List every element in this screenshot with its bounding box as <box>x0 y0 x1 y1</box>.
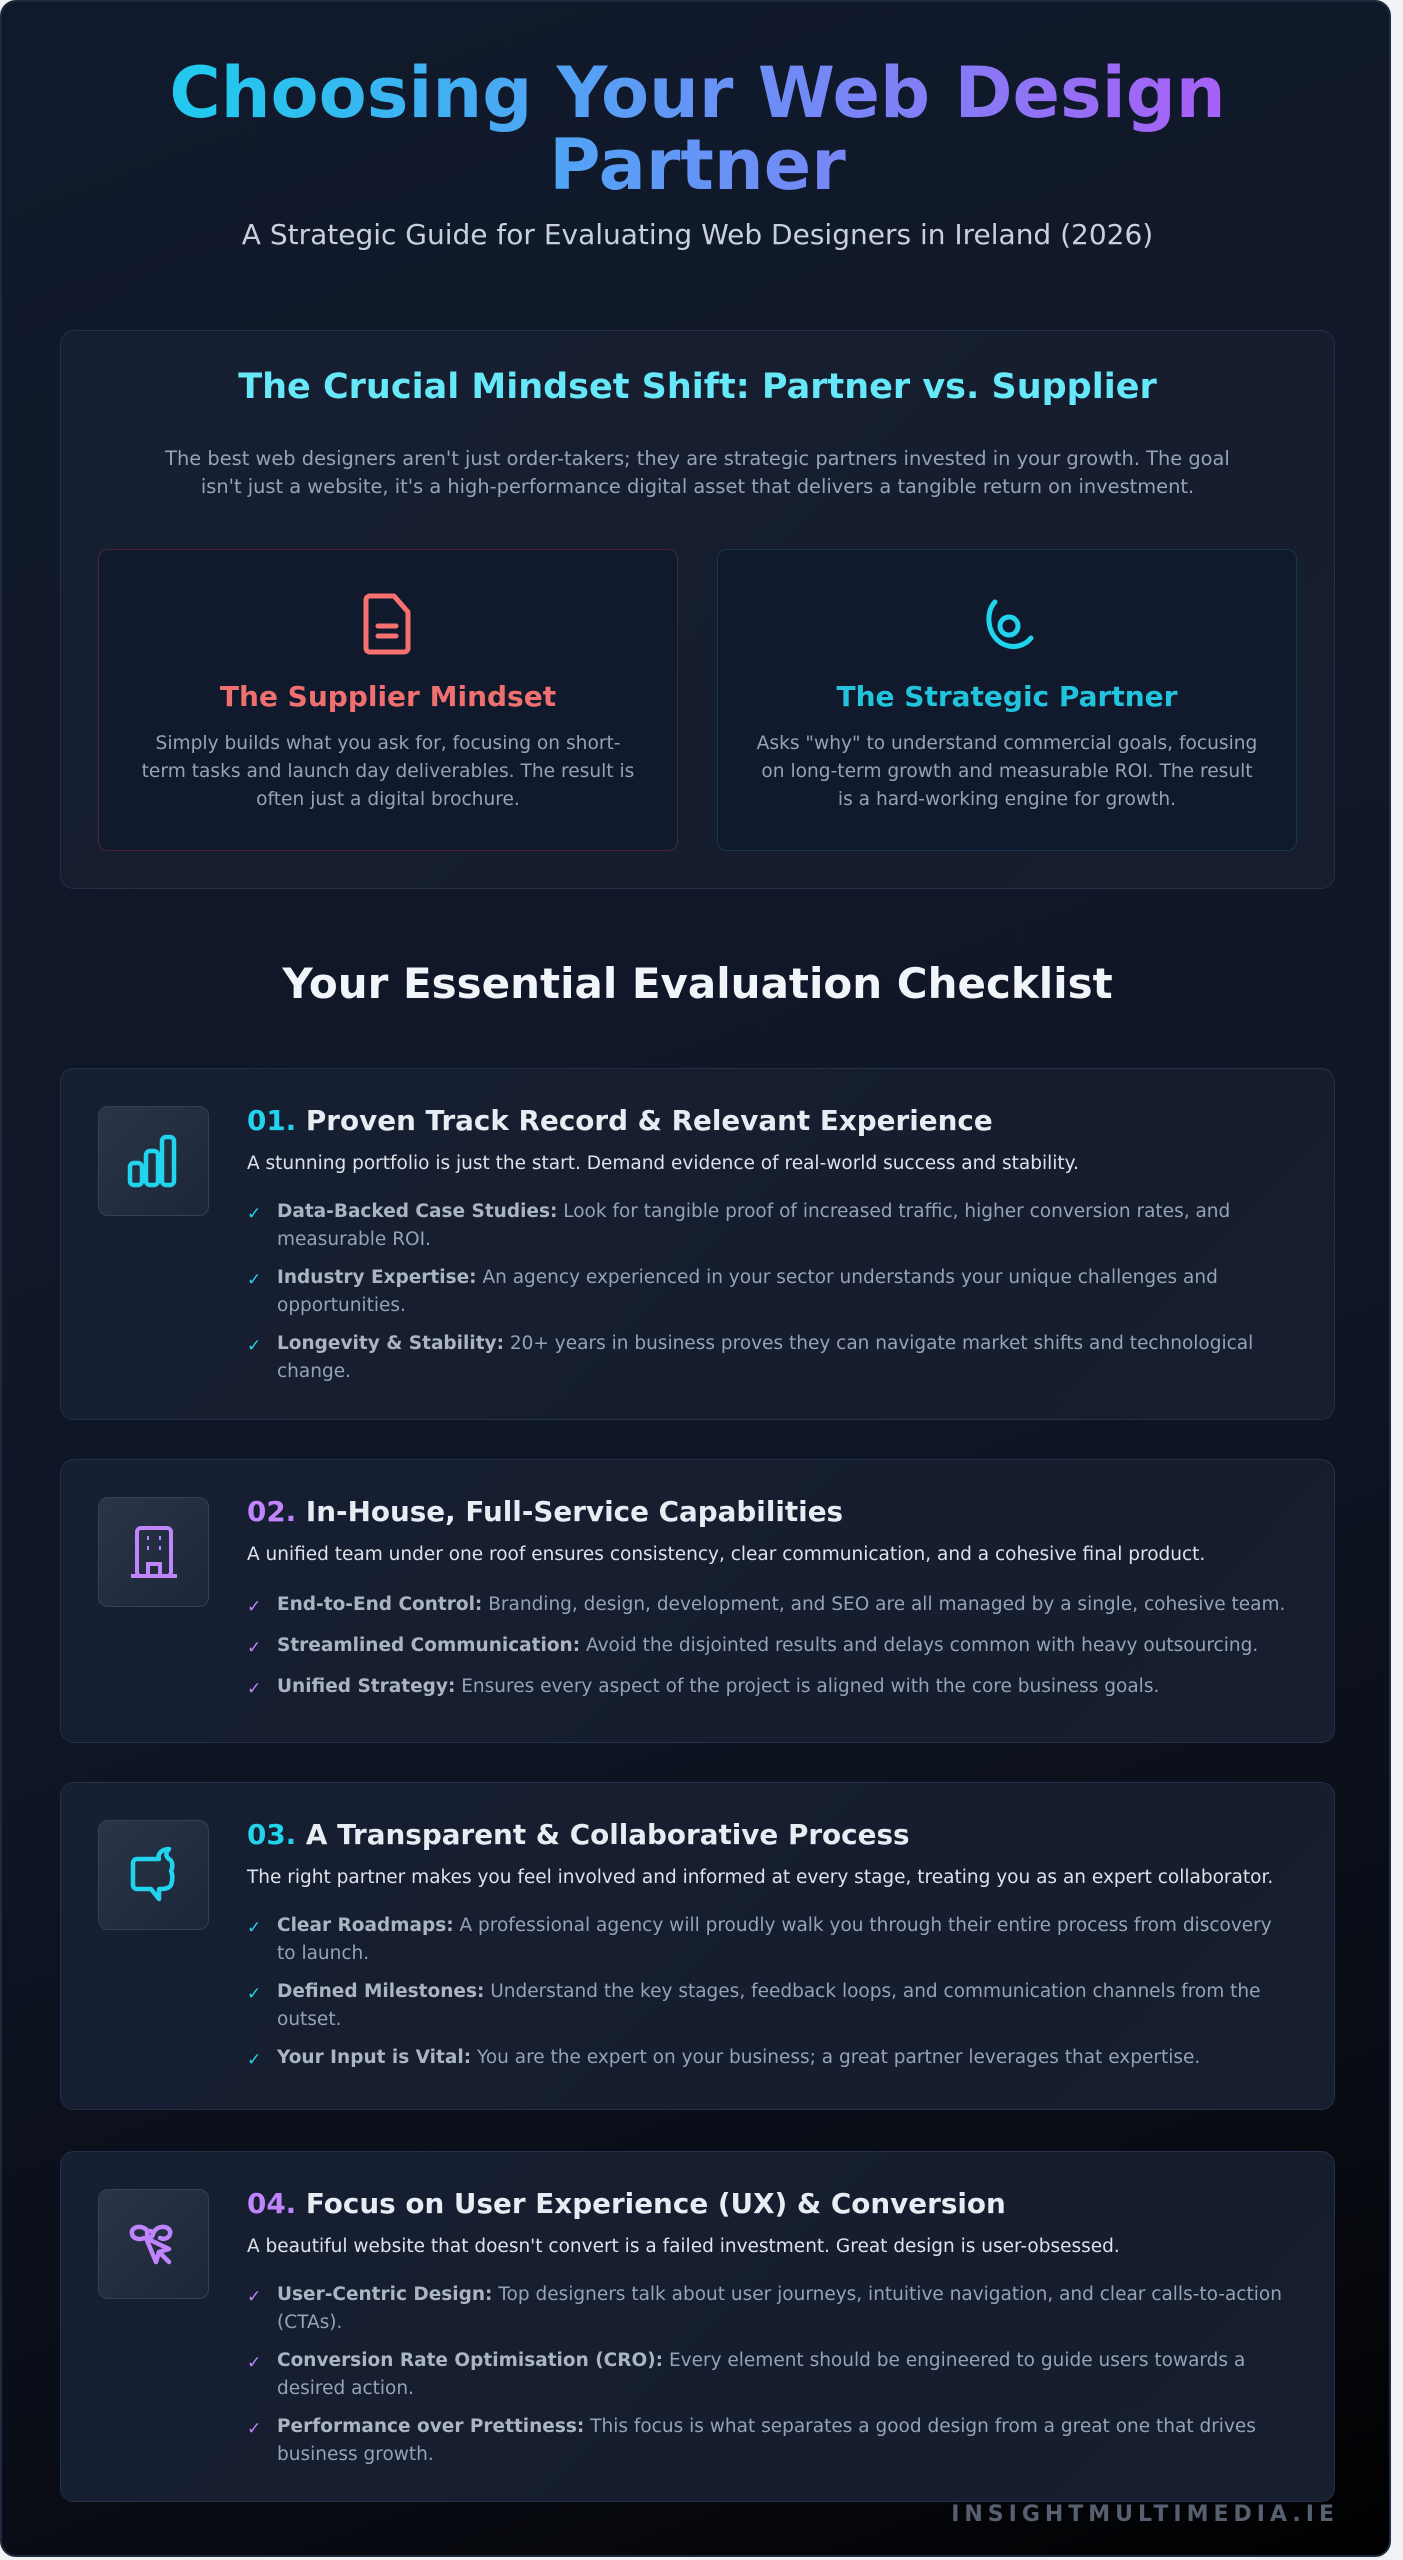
panel: mindset shift <box>60 330 1335 889</box>
card text: Asks "why" to understand commercial goals, focusing <box>757 733 1257 754</box>
item 02 <box>60 1459 1335 1743</box>
bullets <box>250 2284 1282 2465</box>
icon: document <box>364 594 410 654</box>
title: Partner <box>549 124 846 206</box>
icon: building <box>98 1497 209 1607</box>
lead: The right partner makes you feel involved and informed at every stage, treating you as an expert collaborator. <box>247 1867 1273 1888</box>
bullets: User-Centric Design: Top designers talk about user journeys, intuitive navigation, and clear calls-to-action (CTAs). <box>277 2284 1282 2333</box>
lead: A beautiful website that doesn't convert is a failed investment. Great design is user-obsessed. <box>247 2236 1120 2257</box>
intro text <box>165 447 1230 498</box>
card text: often just a digital brochure. <box>256 789 520 810</box>
heading: 02. In-House, Full-Service Capabilities <box>247 1495 843 1528</box>
item 01 <box>60 1068 1335 1420</box>
heading: 01. Proven Track Record & Relevant Experience <box>247 1104 993 1137</box>
bullets: Clear Roadmaps: A professional agency will proudly walk you through their entire process from discovery to launch. <box>277 1915 1272 1964</box>
bullets <box>250 1594 1285 1697</box>
subtitle: A Strategic Guide for Evaluating Web Designers in Ireland (2026) <box>242 218 1153 251</box>
card text <box>756 733 1257 810</box>
bullets: Data-Backed Case Studies: Look for tangible proof of increased traffic, higher conversion rates, and measurable ROI. <box>277 1201 1230 1250</box>
intro text: The best web designers aren't just order-takers; they are strategic partners invested in your growth. The goal <box>165 447 1230 470</box>
card text: term tasks and launch day deliverables. The result is <box>142 761 634 782</box>
bullets: Conversion Rate Optimisation (CRO): Every element should be engineered to guide users towards a desired action. <box>277 2350 1245 2399</box>
card text: Simply builds what you ask for, focusing on short- <box>156 733 620 754</box>
card text: on long-term growth and measurable ROI. The result <box>761 761 1253 782</box>
bullets: Industry Expertise: An agency experienced in your sector understands your unique challenges and opportunities. <box>277 1267 1218 1316</box>
item 03 <box>60 1782 1335 2110</box>
title <box>2 57 1393 201</box>
bullets: Longevity & Stability: 20+ years in business proves they can navigate market shifts and technological change. <box>277 1333 1253 1382</box>
bullets: Unified Strategy: Ensures every aspect of the project is aligned with the core business goals. <box>277 1676 1159 1697</box>
card: strategic partner <box>717 549 1297 851</box>
card heading: The Supplier Mindset <box>220 680 556 713</box>
card text <box>142 733 634 810</box>
heading: 04. Focus on User Experience (UX) & Conversion <box>247 2187 1006 2220</box>
panel heading: The Crucial Mindset Shift: Partner vs. Supplier <box>238 367 1157 407</box>
card heading: The Strategic Partner <box>836 680 1177 713</box>
bullets <box>250 1201 1253 1382</box>
item 04 <box>60 2151 1335 2502</box>
lead: A unified team under one roof ensures consistency, clear communication, and a cohesive final product. <box>247 1544 1205 1565</box>
bullets: Defined Milestones: Understand the key stages, feedback loops, and communication channels from the outset. <box>277 1981 1261 2030</box>
title: Choosing Your Web Design <box>169 52 1226 134</box>
icon: cursor <box>98 2189 209 2299</box>
bullets: Performance over Prettiness: This focus is what separates a good design from a great one that drives business growth. <box>277 2416 1256 2465</box>
bullets: Your Input is Vital: You are the expert on your business; a great partner leverages that expertise. <box>277 2047 1200 2068</box>
icon: bar chart <box>98 1106 209 1216</box>
lead: A stunning portfolio is just the start. Demand evidence of real-world success and stability. <box>247 1153 1079 1174</box>
footer brand: INSIGHTMULTIMEDIA.IE <box>951 2502 1339 2527</box>
intro text: isn't just a website, it's a high-performance digital asset that delivers a tangible return on investment. <box>201 475 1194 498</box>
bullets: Streamlined Communication: Avoid the disjointed results and delays common with heavy outsourcing. <box>277 1635 1258 1656</box>
checklist heading: Your Essential Evaluation Checklist <box>282 959 1113 1008</box>
card: supplier mindset <box>98 549 678 851</box>
bullets <box>250 1915 1272 2068</box>
icon: speech bubble <box>98 1820 209 1930</box>
heading: 03. A Transparent & Collaborative Process <box>247 1818 910 1851</box>
bullets: End-to-End Control: Branding, design, development, and SEO are all managed by a single, cohesive team. <box>277 1594 1285 1615</box>
card text: is a hard-working engine for growth. <box>838 789 1176 810</box>
icon: target <box>986 600 1034 649</box>
